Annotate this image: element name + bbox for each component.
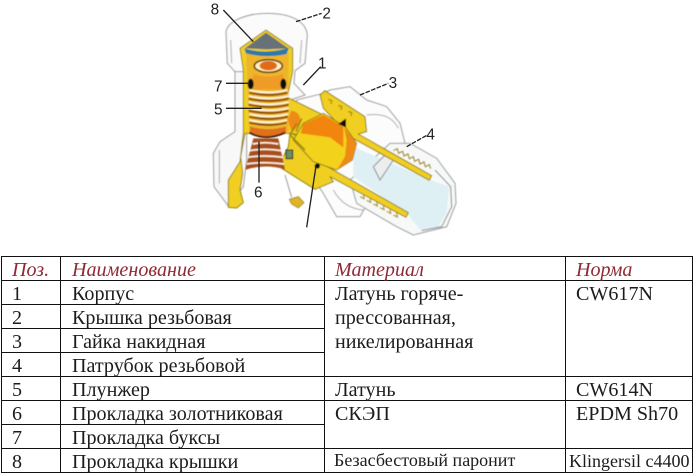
pipe with light blue interior xyxy=(350,143,456,235)
central plug xyxy=(293,113,357,170)
part names: Плунжер xyxy=(72,379,150,401)
part names xyxy=(72,283,283,473)
header: material: Материал xyxy=(335,259,424,281)
threads on the tailpiece xyxy=(393,149,431,169)
small drain nut xyxy=(285,175,292,197)
callout numbers: 7 xyxy=(214,78,223,95)
header row: Поз. xyxy=(12,259,49,281)
callout numbers: 4 xyxy=(426,127,435,144)
callout numbers: 3 xyxy=(389,75,397,92)
green seal xyxy=(286,150,293,159)
callout numbers xyxy=(211,2,435,201)
position numbers: 1 xyxy=(12,283,22,305)
part names: Крышка резьбовая xyxy=(72,307,232,329)
position numbers: 2 xyxy=(12,307,22,329)
position numbers: 4 xyxy=(12,355,22,377)
material: SKEP: СКЭП xyxy=(335,403,390,425)
position numbers: 3 xyxy=(12,331,22,353)
header: norm: Норма xyxy=(576,259,632,281)
material: hot-pressed brass: никелированная xyxy=(335,331,473,353)
position numbers: 7 xyxy=(12,427,22,449)
callout numbers: 5 xyxy=(214,102,223,119)
cap nut outline xyxy=(226,13,307,100)
material: hot-pressed brass xyxy=(335,283,473,353)
plug seal dot xyxy=(315,163,320,169)
inner plunger head xyxy=(254,60,282,72)
seal triangle xyxy=(338,118,346,127)
callout numbers: 6 xyxy=(254,184,263,201)
callout numbers: 2 xyxy=(322,6,331,23)
position numbers xyxy=(12,283,22,473)
material: brass: Латунь xyxy=(335,379,396,401)
part names: Прокладка золотниковая xyxy=(72,403,283,425)
part names: Корпус xyxy=(72,283,134,305)
leader lines xyxy=(223,10,427,227)
material: paronite: Безасбестовый паронит xyxy=(334,450,515,470)
norm: EPDM Sh70: EPDM Sh70 xyxy=(576,403,678,425)
norm: Klingersil c4400: Klingersil c4400 xyxy=(569,451,689,471)
seat gasket 6 xyxy=(245,138,285,170)
plunger threads xyxy=(249,90,289,125)
callout numbers: 1 xyxy=(318,56,327,73)
part names: Прокладка буксы xyxy=(72,427,220,449)
callout numbers: 8 xyxy=(211,2,219,19)
brass valve body xyxy=(228,30,432,217)
gasket 7 black rings xyxy=(248,79,254,89)
plunger chamber xyxy=(246,53,289,133)
part names: Патрубок резьбовой xyxy=(72,355,245,377)
body flange outline xyxy=(213,72,247,206)
norm: CW614N: CW614N xyxy=(576,379,653,401)
orange cavity near plunger xyxy=(288,111,300,133)
material: hot-pressed brass: прессованная, xyxy=(335,307,456,329)
part names: Гайка накидная xyxy=(72,331,206,353)
material: hot-pressed brass: Латунь горяче- xyxy=(335,283,463,305)
union nut outline xyxy=(290,87,405,217)
norm: CW617N: CW617N xyxy=(576,283,653,305)
plunger seat block xyxy=(250,127,286,138)
position numbers: 5 xyxy=(12,379,22,401)
cap gasket 8 xyxy=(245,33,288,49)
diagram: valve cross-section xyxy=(211,2,457,236)
position numbers: 8 xyxy=(12,451,22,473)
position numbers: 6 xyxy=(12,403,22,425)
header: name: Наименование xyxy=(72,259,196,281)
part names: Прокладка крышки xyxy=(72,451,238,473)
